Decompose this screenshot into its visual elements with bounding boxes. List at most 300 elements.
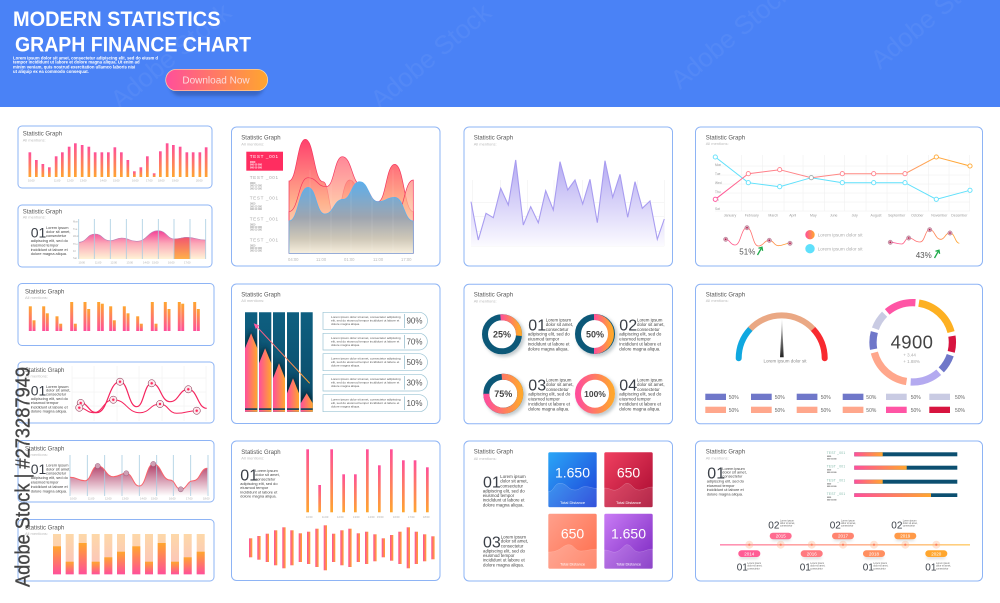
donut 50 percent: 50%: [586, 329, 604, 339]
text block 03: Lorem ipsum: [501, 534, 526, 539]
area chart: [288, 139, 413, 262]
timeline: [720, 520, 970, 574]
text block 02: incididunt ut labore et: [619, 342, 662, 347]
axis labels: 17:00: [146, 178, 153, 182]
number text block: 01: [240, 468, 258, 485]
text block 01: 01: [528, 318, 546, 335]
timeline labels top: dolor sit amet,: [903, 522, 918, 525]
number text block: dolore magna aliqua.: [707, 491, 743, 496]
text block 02: dolor sit amet,: [637, 322, 665, 327]
percentage list: elit, sed do eiusmod tempor incididunt ut labore et: [331, 401, 399, 405]
legend swatches: 50%: [729, 408, 739, 414]
text block 01: incididunt ut labore et: [483, 498, 525, 503]
tab list: 000 00 000: [250, 247, 263, 250]
subheading: All mentions:: [241, 298, 264, 303]
timeline labels bottom: Lorem ipsum: [936, 562, 950, 565]
area chart: 11:00: [373, 257, 384, 262]
text block 03: eiusmod tempor: [483, 553, 515, 558]
text block 01: dolor sit amet,: [500, 479, 528, 484]
number text block: adipiscing elit, sed do: [707, 479, 744, 484]
heading: Statistic Graph: [474, 293, 513, 299]
area chart: 15:00: [151, 496, 158, 500]
timeline labels bottom: 01: [800, 563, 811, 574]
progress bars: 000 00 000: [827, 486, 836, 488]
month labels: December: [951, 214, 968, 218]
number text block: Lorem ipsum: [46, 462, 68, 468]
text block 04: Lorem ipsum: [637, 377, 663, 382]
percentage list: dolore magna aliqua.: [331, 364, 360, 368]
area chart: 11:00: [316, 257, 327, 262]
line chart: Sat: [715, 207, 720, 211]
percentage list: Lorem ipsum dolor sit amet, consectetur adipiscing: [331, 356, 401, 360]
area chart: 16:00: [169, 496, 176, 500]
subheading: All mentions:: [706, 455, 729, 460]
banner paragraph: minim veniam, quis nostrud exercitation ullamco laboris nisi: [13, 64, 135, 69]
month labels: March: [768, 214, 778, 218]
line chart: Mon: [715, 163, 721, 167]
timeline labels top: 02: [830, 520, 841, 531]
trend arrow: [254, 323, 310, 383]
text block 03: [483, 534, 528, 568]
card: purple: [604, 514, 653, 569]
axis labels: 11:00: [54, 178, 61, 182]
text block 01: consectetur: [500, 483, 524, 488]
axis labels: 12:00: [67, 178, 74, 182]
bar axis labels: 13:00: [353, 515, 360, 519]
subheading: All mentions:: [25, 295, 48, 300]
panel: bars and waveform: [232, 441, 440, 580]
area chart: Wed: [73, 234, 79, 238]
tab list: 000 00 000: [250, 185, 263, 188]
area chart: [471, 160, 664, 246]
card: blue: [548, 452, 597, 507]
axis labels: 20:00: [196, 178, 203, 182]
panel: lavender area chart: [464, 127, 672, 266]
text block 03: Lorem ipsum: [546, 377, 572, 382]
area chart: 01:00: [344, 257, 355, 262]
text block 04: [619, 377, 665, 412]
card: purple: 1.650: [611, 526, 646, 542]
number text block: [240, 468, 280, 499]
number text block: incididunt ut labore et: [707, 487, 745, 492]
number text block: 01: [31, 225, 46, 241]
bar axis labels: 14:00: [368, 515, 375, 519]
heading: Statistic Graph: [706, 292, 745, 298]
text block 01: eiusmod tempor: [528, 337, 560, 342]
percentage list: elit, sed do eiusmod tempor incididunt ut labore et: [331, 340, 399, 344]
timeline labels top: 02: [768, 520, 780, 531]
area chart: 11:00: [88, 496, 95, 500]
card: red: [604, 452, 653, 507]
area chart: 16:00: [168, 260, 175, 264]
timeline labels bottom: 01: [737, 563, 748, 574]
area chart: [70, 455, 210, 500]
timeline labels bottom: consectetur: [810, 567, 823, 570]
donut 100 percent: 100%: [584, 389, 606, 399]
title: GRAPH FINANCE CHART: [15, 34, 251, 57]
tab list: 0000: [250, 244, 256, 247]
ring value: [891, 332, 933, 364]
ring value: + 1.88%: [903, 359, 920, 364]
text block 01: dolore magna aliqua.: [483, 503, 524, 508]
subheading: All mentions:: [474, 456, 497, 461]
heading: Statistic Graph: [474, 449, 513, 455]
month labels: April: [789, 214, 796, 218]
gauge: [739, 315, 825, 363]
card: purple: Total Distance: [616, 562, 642, 566]
year pills: 2016: [807, 551, 817, 556]
percentage list: Lorem ipsum dolor sit amet, consectetur adipiscing: [331, 315, 401, 319]
text block 03: consectetur: [546, 387, 569, 392]
year pills: 2017: [838, 534, 849, 539]
text block 03: dolore magna aliqua.: [528, 407, 569, 412]
line chart: Thu: [715, 190, 721, 194]
line chart: Wed: [715, 181, 722, 185]
text block 02: eiusmod tempor: [619, 337, 651, 342]
percentage list: 70%: [406, 338, 423, 346]
area chart: 17:00: [401, 257, 412, 262]
percentage list: Lorem ipsum dolor sit amet, consectetur adipiscing: [331, 398, 401, 402]
percentage list: 50%: [406, 358, 423, 367]
card: blue: Total Distance: [560, 500, 586, 505]
area chart: Tue: [73, 227, 78, 231]
heading: Statistic Graph: [706, 135, 745, 141]
percentage list: [323, 312, 428, 412]
timeline labels bottom: Lorem ipsum: [810, 562, 824, 565]
percentage list: 30%: [406, 378, 423, 388]
progress bars: TEST _001: [827, 478, 845, 482]
text block 01: dolore magna aliqua.: [528, 347, 569, 352]
text block 01: Lorem ipsum: [500, 474, 526, 479]
bar axis labels: 11:00: [322, 515, 329, 519]
bars: [29, 302, 200, 331]
panel: stacked bars: [18, 520, 214, 581]
text block 01: incididunt ut labore et: [528, 342, 570, 347]
text block 01: dolor sit amet,: [546, 322, 573, 327]
bar axis labels: 16:00: [393, 515, 400, 519]
timeline labels bottom: [737, 562, 951, 574]
heading: Statistic Graph: [23, 132, 62, 138]
number text block: dolore magna aliqua.: [31, 488, 67, 494]
download button: [166, 69, 268, 96]
text block 01: 01: [483, 475, 501, 492]
panel: paired bars: [18, 284, 214, 346]
donut 25 percent: [482, 314, 524, 357]
text block 02: adipiscing elit, sed do: [619, 332, 662, 337]
subheading: All mentions:: [706, 141, 729, 146]
panel: progress columns: [232, 284, 440, 424]
bar axis labels: 10:00: [306, 515, 313, 519]
tab list: 000 00 000: [250, 205, 263, 208]
faint banner watermark: Adobe Stock: [365, 0, 498, 115]
timeline labels top: consectetur: [780, 524, 793, 527]
gauge: Lorem ipsum dolor sit: [763, 358, 807, 363]
bar axis labels: 17:00: [408, 515, 415, 519]
text block 02: [619, 317, 665, 352]
donut 75 percent: 75%: [494, 389, 512, 399]
heading: Statistic Graph: [25, 526, 64, 532]
number text block: dolor sit amet,: [46, 388, 70, 392]
year pills: [738, 533, 947, 557]
month labels: July: [852, 214, 858, 218]
tab list: 000 00 000: [250, 187, 263, 190]
legend swatches: 50%: [866, 395, 877, 401]
text block 04: consectetur: [637, 387, 660, 392]
axis labels: 16:00: [132, 178, 139, 182]
sparkline right: [888, 228, 959, 260]
number text block: eiusmod tempor: [31, 242, 59, 248]
percentage list: dolore magna aliqua.: [331, 384, 360, 388]
donut 50 percent: [575, 314, 618, 356]
vertical stock id text: Adobe Stock | #273287949: [12, 367, 34, 587]
number text block: consectetur: [722, 474, 743, 479]
legend: [805, 230, 863, 253]
sparkline right: 43%: [916, 251, 932, 260]
timeline labels bottom: 01: [863, 563, 874, 574]
month labels: August: [871, 214, 881, 218]
card: coral: [548, 514, 597, 569]
text block 01: [483, 474, 528, 508]
faint banner watermark: [105, 0, 998, 115]
text block 02: 02: [619, 318, 637, 335]
icon: green arrow: [758, 247, 763, 255]
percentage list: dolore magna aliqua.: [331, 343, 360, 347]
number text block: Lorem ipsum: [255, 468, 278, 473]
legend swatches: 50%: [911, 395, 921, 401]
download button: Download Now: [182, 76, 250, 86]
area chart: Fri: [73, 249, 76, 253]
legend swatches: 50%: [866, 408, 877, 414]
text block 02: consectetur: [637, 327, 660, 332]
timeline labels bottom: consectetur: [747, 567, 760, 570]
text block 03: eiusmod tempor: [528, 397, 560, 402]
selected tab: TEST _001: [250, 154, 279, 159]
legend swatches: 50%: [955, 408, 966, 414]
area chart: Mon: [73, 220, 79, 224]
number text block: dolor sit amet,: [722, 470, 747, 475]
area chart: 10:00: [78, 260, 86, 264]
column chart: [245, 312, 313, 412]
number text block: consectetur: [46, 470, 67, 476]
tab list: TEST _001: [250, 216, 279, 221]
ring value: + 3.44: [903, 352, 916, 358]
text block 04: dolor sit amet,: [637, 382, 665, 387]
year pills: 2015: [776, 534, 786, 539]
number text block: consectetur: [46, 233, 67, 238]
timeline labels top: consectetur: [903, 524, 915, 527]
subheading: All mentions:: [474, 141, 497, 146]
tab list: TEST _001: [250, 237, 279, 242]
text block 01: [528, 317, 573, 352]
tab list: 0000: [250, 203, 256, 206]
number text block: dolor sit amet,: [255, 472, 280, 477]
heading: Statistic Graph: [241, 450, 281, 456]
tab list: [250, 175, 279, 253]
number text block: consectetur: [46, 392, 67, 396]
waveform bars: [249, 525, 435, 570]
progress bars: 0000: [827, 470, 831, 472]
number text block: [31, 225, 70, 256]
axis labels: 19:00: [172, 178, 179, 182]
heading: Statistic Graph: [241, 135, 281, 141]
line chart: [72, 366, 207, 421]
subheading: All mentions:: [241, 141, 264, 146]
number text block: incididunt ut labore et: [240, 489, 278, 494]
legend swatches: 50%: [775, 395, 785, 401]
panel: area chart with highlight: [18, 205, 212, 267]
timeline labels top: Lorem ipsum: [841, 520, 855, 523]
text block 04: eiusmod tempor: [619, 397, 651, 402]
number text block: Lorem ipsum: [46, 225, 68, 230]
month labels: February: [745, 214, 759, 218]
timeline labels top: [768, 520, 918, 531]
month labels: January: [724, 214, 736, 218]
timeline labels top: dolor sit amet,: [841, 522, 856, 525]
text block 01: consectetur: [546, 327, 569, 332]
number text block: [31, 383, 70, 414]
text block 01: adipiscing elit, sed do: [528, 332, 570, 337]
number text block: incididunt ut labore et: [31, 484, 69, 489]
area chart: 13:00: [122, 496, 129, 500]
progress bars: [827, 451, 957, 502]
panel: double line chart: [18, 362, 214, 423]
panel: overlapping area chart: [232, 127, 440, 266]
heading: Statistic Graph: [25, 447, 64, 453]
year pills: 2014: [744, 551, 755, 556]
heading: Statistic Graph: [474, 135, 513, 141]
card: blue: 1.650: [555, 464, 590, 480]
banner paragraph: tempor incididunt ut labore et dolore magna aliqua. Ut enim ad: [13, 60, 140, 65]
sparkline left: [724, 226, 792, 257]
area chart: 17:00: [184, 260, 191, 264]
text block 03: [528, 377, 574, 412]
year pills: 2019: [900, 534, 911, 539]
text block 03: 03: [528, 378, 546, 395]
legend swatches: 50%: [775, 408, 785, 414]
heading: Statistic Graph: [25, 368, 64, 374]
bar axis labels: 12:00: [337, 515, 344, 519]
area chart: 12:00: [105, 496, 112, 500]
ring value: 4900: [891, 332, 933, 352]
panel: donut charts: [464, 284, 672, 424]
area chart: 17:00: [186, 496, 193, 500]
number text block: adipiscing elit, sed do: [31, 475, 68, 480]
timeline labels bottom: Lorem ipsum: [747, 562, 761, 565]
timeline labels top: Lorem ipsum: [780, 520, 794, 523]
percentage list: elit, sed do eiusmod tempor incididunt ut labore et: [331, 360, 399, 364]
tab list: 0000: [250, 182, 256, 185]
panel: metric cards: [464, 441, 672, 581]
subheading: All mentions:: [25, 452, 48, 457]
area chart: 14:00: [140, 496, 147, 500]
number text block: Lorem ipsum: [722, 466, 745, 471]
number text block: Lorem ipsum: [46, 384, 68, 389]
subheading: All mentions:: [25, 531, 48, 536]
area chart: 11:00: [95, 260, 102, 264]
number text block: dolore magna aliqua.: [240, 494, 277, 499]
percentage list: elit, sed do eiusmod tempor incididunt ut labore et: [331, 380, 399, 384]
number text block: dolor sit amet,: [46, 466, 70, 472]
timeline labels bottom: Lorem ipsum: [873, 562, 887, 565]
text block 02: dolore magna aliqua.: [619, 347, 660, 352]
year pills: 2018: [869, 551, 880, 556]
selected tab: 000 00 000: [250, 166, 263, 169]
number text block: eiusmod tempor: [240, 485, 269, 490]
text block 01: Lorem ipsum: [546, 317, 571, 322]
subheading: All mentions:: [706, 298, 729, 303]
timeline labels bottom: dolor sit amet,: [873, 565, 889, 568]
number text block: adipiscing elit, sed do: [31, 238, 68, 243]
area chart: 14:00: [143, 260, 150, 264]
progress bars: 000 00 000: [827, 458, 836, 460]
axis labels: 10:00: [28, 178, 35, 182]
subheading: All mentions:: [241, 456, 264, 461]
area chart: Sat: [73, 256, 77, 260]
number text block: adipiscing elit, sed do: [240, 481, 278, 486]
tab list: 000 00 000: [250, 226, 263, 229]
faint banner watermark: Adobe Stock: [105, 0, 238, 115]
percentage list: Lorem ipsum dolor sit amet, consectetur adipiscing: [331, 377, 401, 381]
legend: Lorem ipsum dolor sit: [818, 246, 863, 252]
progress bars: TEST _001: [827, 451, 845, 455]
area chart: Thu: [73, 242, 78, 246]
panel: gauge and ring: [696, 284, 982, 424]
legend swatches: 50%: [821, 395, 831, 401]
number text block: [31, 461, 70, 494]
heading: Statistic Graph: [25, 289, 64, 295]
number text block: dolore magna aliqua.: [31, 408, 67, 414]
text block 04: incididunt ut labore et: [619, 402, 662, 407]
title: [13, 8, 251, 57]
line chart: Fri: [715, 198, 719, 202]
month labels: November: [931, 214, 948, 218]
tab list: 0000: [250, 223, 256, 226]
year pills: 2020: [931, 551, 942, 556]
text block 03: incididunt ut labore et: [483, 558, 526, 563]
timeline labels bottom: dolor sit amet,: [747, 565, 763, 568]
text block 03: dolor sit amet,: [501, 539, 528, 544]
selected tab: 000 00 000: [250, 164, 263, 167]
number text block: consectetur: [255, 476, 276, 482]
card: coral: Total Distance: [560, 562, 586, 566]
number text block: 01: [707, 465, 725, 482]
text block 04: dolore magna aliqua.: [619, 407, 660, 412]
text block 01: adipiscing elit, sed do: [483, 488, 525, 493]
text block 03: 03: [483, 535, 501, 552]
icon: green arrow: [934, 250, 940, 258]
vertical bars: [306, 449, 429, 512]
area chart: 15:00: [152, 260, 159, 264]
axis labels: 13:00: [80, 178, 87, 182]
legend swatches: 50%: [955, 395, 966, 401]
tab list: 000 00 000: [250, 250, 263, 253]
panel: shaded curve chart: [18, 440, 214, 502]
month labels: May: [810, 214, 817, 218]
bar backgrounds: [53, 534, 205, 574]
heading: Statistic Graph: [23, 209, 62, 215]
donut 25 percent: 25%: [493, 330, 511, 340]
banner paragraph: ut aliquip ex ea commodo consequat.: [13, 69, 89, 74]
progress bars: 0000: [827, 484, 831, 486]
area chart: 13:00: [126, 260, 134, 264]
text block 01: eiusmod tempor: [483, 493, 515, 498]
timeline labels top: dolor sit amet,: [780, 522, 795, 525]
progress bars: 0000: [827, 497, 831, 499]
timeline labels bottom: dolor sit amet,: [936, 565, 951, 568]
line chart: [713, 155, 972, 218]
timeline labels top: Lorem ipsum: [903, 520, 917, 523]
text block 03: dolor sit amet,: [546, 382, 574, 387]
